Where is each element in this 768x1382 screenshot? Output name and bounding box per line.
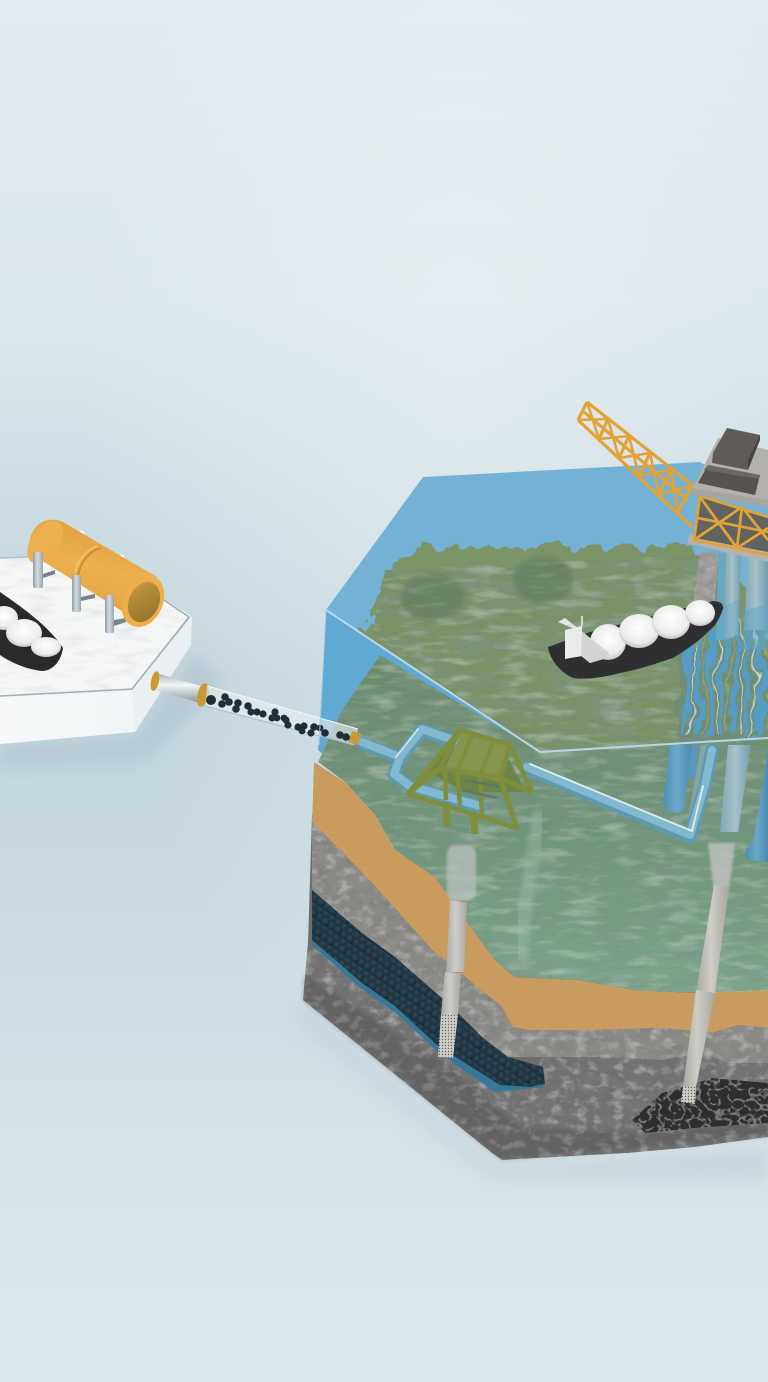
platform legs below water surface — [663, 745, 768, 862]
lower concrete deck lip — [687, 533, 768, 562]
domes — [590, 624, 626, 660]
middle grey rock layer — [312, 815, 768, 1063]
bottom rock layer — [303, 943, 768, 1160]
pellets — [206, 693, 355, 742]
platform shadow — [0, 650, 225, 768]
gold flanges — [149, 670, 161, 692]
platform top surface — [0, 557, 191, 697]
green seabed manifold structure — [408, 730, 532, 834]
platform legs above water — [693, 552, 768, 650]
rock underlay — [303, 815, 768, 1160]
small ship on platform — [0, 592, 63, 671]
concrete leg — [693, 552, 718, 603]
bridge superstructure — [558, 618, 610, 663]
lower truss interior — [695, 496, 768, 552]
seabed pipeline — [348, 729, 712, 837]
block shadow on floor — [295, 1000, 768, 1180]
upper concrete deck — [693, 438, 768, 507]
offshore platform decks — [687, 428, 768, 562]
left platform: hexagonal storage base — [0, 514, 225, 768]
sand layer — [312, 762, 768, 1033]
dark shading at base of rock — [303, 975, 768, 1160]
LNG carrier ship — [548, 600, 723, 679]
seafloor plume traces — [520, 810, 540, 960]
coal-bearing layer with spheres — [312, 890, 543, 1092]
water surface edge highlight — [319, 610, 768, 752]
gold pipe coupling — [348, 731, 362, 745]
platform side wall — [0, 616, 192, 744]
dark deck housings — [712, 428, 760, 470]
blue steel legs — [716, 553, 727, 640]
hull — [548, 601, 723, 679]
sea floor in front of water edge — [318, 655, 768, 993]
steel pipe — [152, 673, 204, 703]
orange cylinder on supports — [20, 514, 172, 634]
orange truss bracing — [694, 496, 768, 555]
dark coal seam on right — [632, 1078, 768, 1133]
refracted legs in water — [678, 620, 768, 745]
right well casing — [681, 843, 735, 1104]
submerged sea floor seen through water surface — [360, 546, 768, 758]
crane boom — [578, 402, 696, 527]
connector: steel pipe and transparent tube with pellets — [149, 670, 358, 745]
water body: back and left faces — [318, 462, 768, 790]
ground block — [303, 655, 768, 1160]
left well casing — [438, 845, 476, 1058]
transparent tube — [205, 686, 358, 745]
